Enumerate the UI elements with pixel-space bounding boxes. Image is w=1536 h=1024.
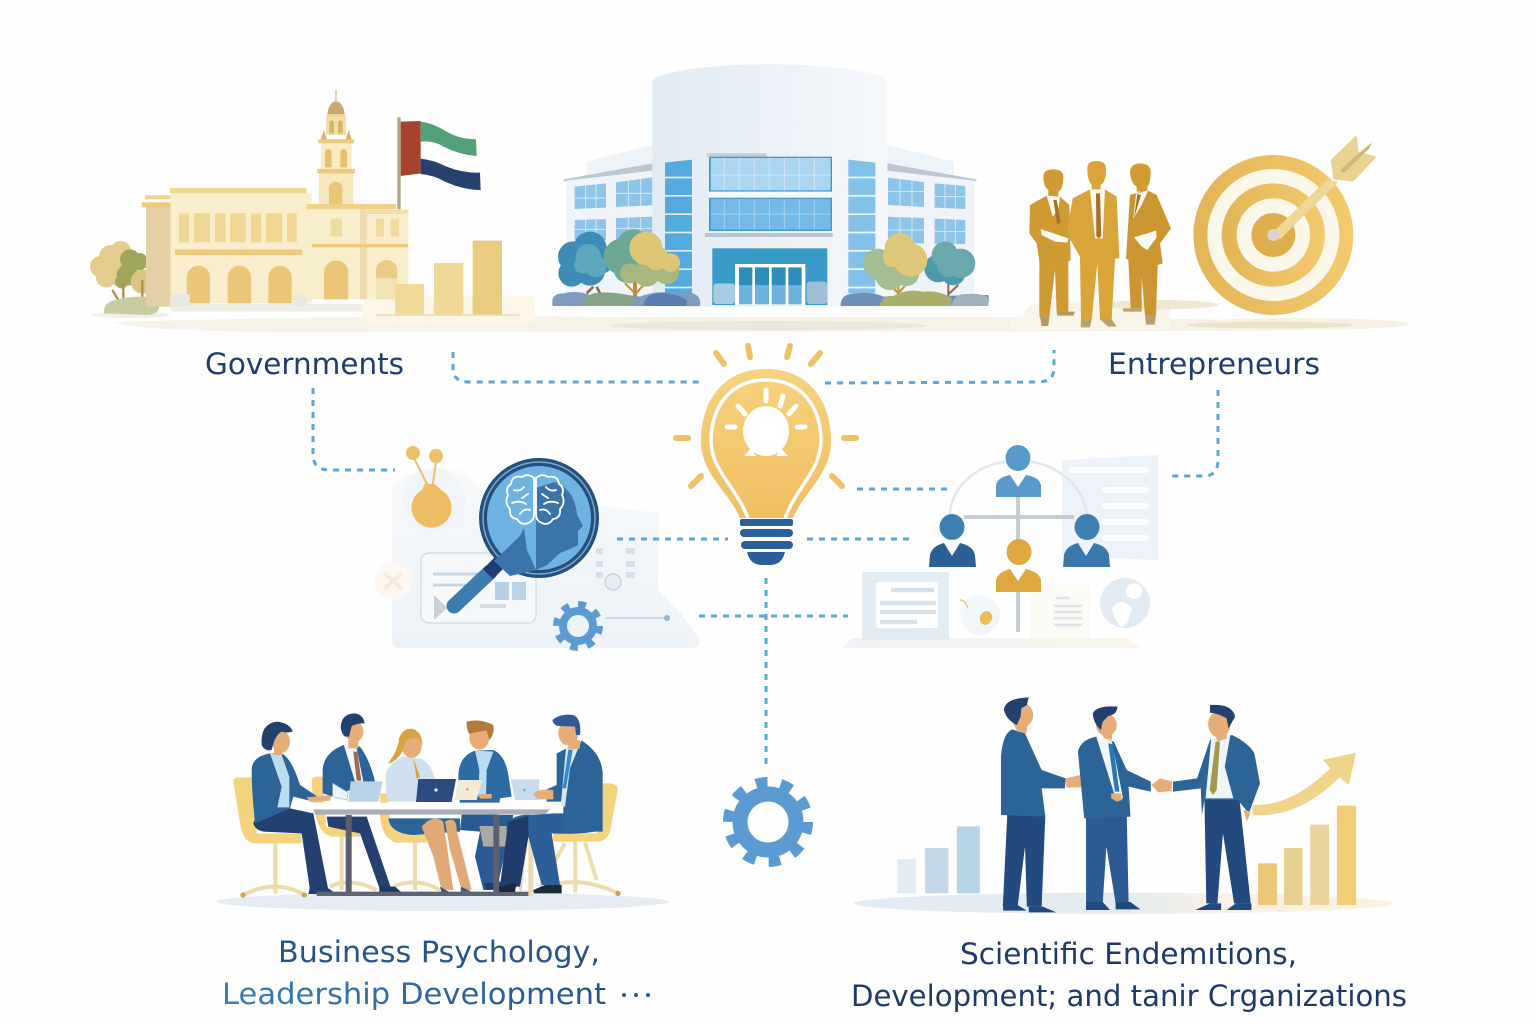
ellipsis dots (622, 993, 650, 997)
chart connectors (950, 462, 1087, 632)
central glazing (705, 153, 833, 237)
flag (397, 117, 481, 209)
man left (1001, 697, 1085, 912)
left wing (563, 145, 652, 307)
right window strip (848, 160, 875, 293)
bell tower (317, 90, 355, 205)
caption: Leadership Development: Leadership Development (222, 977, 606, 1011)
report card (862, 572, 949, 640)
gold capsule note (960, 595, 1000, 635)
entrepreneur left (1029, 169, 1075, 326)
illustration: handshake and growth (854, 697, 1392, 914)
small data tiles (596, 548, 635, 578)
illustration: research and psychology panel (374, 446, 700, 648)
person 1 woman left (252, 722, 337, 894)
magnifying glass (454, 458, 599, 606)
faint badge (374, 562, 412, 600)
floor shadow (217, 892, 669, 911)
entrepreneur right (1123, 163, 1171, 325)
person right (1063, 514, 1110, 567)
gold bar chart (376, 241, 519, 316)
chairs (233, 777, 621, 898)
entrepreneur centre (1067, 161, 1119, 327)
government ground shadows (90, 304, 367, 318)
dotted connector lines (313, 350, 1218, 766)
background document (1062, 455, 1158, 560)
illustration: entrepreneurs and target (1010, 135, 1408, 330)
faint base (842, 638, 1140, 648)
caption: Development and tanir Crganizations: Development; and tanir Crganizations (851, 979, 1407, 1013)
left trees and shrubs (552, 229, 700, 306)
illustration: organisation chart panel (842, 445, 1158, 648)
man centre (1078, 706, 1151, 910)
icon: large gear (729, 783, 807, 861)
label: Entrepreneurs: Entrepreneurs (1108, 347, 1320, 381)
table (290, 803, 560, 896)
caption: Business Psychology: Business Psychology, (278, 935, 600, 969)
man right (1152, 705, 1260, 910)
arrow in target (1267, 135, 1377, 241)
rotunda (652, 64, 887, 307)
bulb screw base (740, 519, 793, 565)
main block (170, 188, 312, 307)
entrance (712, 248, 827, 305)
flask icon (402, 446, 466, 532)
ground shadow (610, 321, 927, 330)
ground shadows (1010, 300, 1408, 330)
right block (307, 204, 408, 299)
bulb inner highlight (711, 380, 821, 518)
faint backdrop panel (392, 470, 700, 648)
growth arrow (1253, 753, 1356, 815)
bulb glass (701, 369, 831, 518)
document card (421, 553, 536, 623)
person 2 man with tie (323, 713, 402, 892)
gear connector (605, 615, 670, 621)
head silhouette (494, 482, 583, 576)
illustration: government building with flag and bars (90, 90, 535, 327)
icon: central light bulb (676, 346, 856, 565)
ground band under the top row (115, 316, 1410, 332)
left window strip (665, 160, 692, 293)
floor shadow (854, 893, 1392, 914)
person 5 man right (499, 715, 603, 893)
trees (90, 241, 159, 315)
person 3 woman light jacket (386, 729, 472, 893)
person top (996, 445, 1041, 497)
caption: Scientific Endemıtions: Scientific Endemıtions, (960, 937, 1297, 971)
blue bar chart (897, 826, 980, 893)
person bottom gold (996, 539, 1041, 592)
gold bar chart (1258, 806, 1356, 905)
target (1193, 155, 1353, 315)
bulb rays (676, 346, 856, 486)
right trees and shrubs (841, 233, 989, 306)
illustration: central headquarters building (552, 64, 989, 330)
left wing (142, 195, 171, 307)
right wing (887, 145, 977, 307)
illustration: business meeting (217, 713, 669, 911)
small page (1030, 585, 1090, 638)
person left (929, 514, 976, 567)
small gear (557, 605, 599, 647)
laptops (333, 779, 539, 802)
brain outline (506, 475, 564, 524)
person 4 man brown hair (458, 721, 513, 890)
faint dial (605, 574, 621, 590)
platform under bars (362, 295, 535, 327)
label: Governments: Governments (205, 347, 404, 381)
globe (1100, 578, 1150, 628)
